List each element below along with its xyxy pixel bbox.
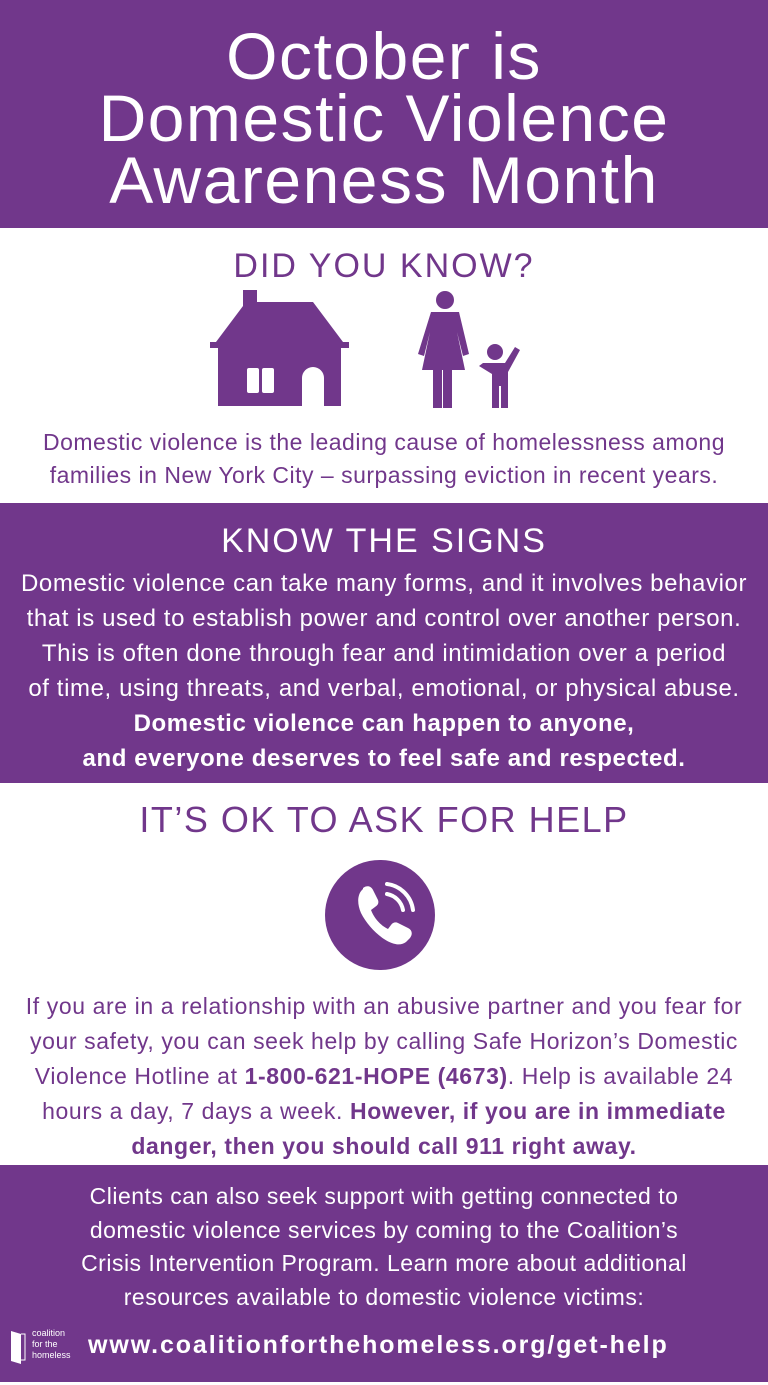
text: crisis intervention: domestic violence services by coming to the Coalition’s [90, 1216, 678, 1242]
text: signs: Domestic violence can take many forms, and it involves behavior [21, 570, 747, 597]
text: crisis intervention: resources available to domestic violence victims: [124, 1284, 644, 1310]
heading: did you know: DID YOU KNOW? [233, 247, 535, 285]
text: crisis intervention: Crisis Intervention Program. Learn more about additional [81, 1250, 687, 1276]
text: crisis intervention: Clients can also seek support with getting connected to [90, 1183, 678, 1209]
text: signs: and everyone deserves to feel safe and respected. [82, 745, 686, 772]
url: www.coalitionforthehomeless.org/get-help [88, 1331, 669, 1359]
text: hotline: If you are in a relationship with an abusive partner and you fear for [26, 993, 742, 1019]
text: signs: of time, using threats, and verbal, emotional, or physical abuse. [28, 675, 740, 702]
text: signs: This is often done through fear and intimidation over a period [42, 640, 726, 667]
text: signs [21, 570, 747, 772]
title [99, 19, 669, 217]
logo: coalition for the homeless: for the [32, 1339, 58, 1349]
text: hotline: danger, then you should call 911 right away. [131, 1133, 637, 1159]
panel: ask for help [26, 799, 742, 1159]
panel: did you know [43, 247, 725, 488]
logo: coalition for the homeless: homeless [32, 1350, 71, 1360]
text: crisis intervention [81, 1183, 687, 1310]
text: leading cause: families in New York City – surpassing eviction in recent years. [50, 462, 718, 488]
text: hotline: your safety, you can seek help by calling Safe Horizon’s Domestic [30, 1028, 738, 1054]
text: leading cause [43, 429, 725, 488]
logo: coalition for the homeless [11, 1328, 71, 1364]
text: signs: Domestic violence can happen to anyone, [134, 710, 634, 737]
logo: coalition for the homeless: coalition [32, 1328, 65, 1338]
text: leading cause: Domestic violence is the leading cause of homelessness among [43, 429, 725, 455]
heading: ask for help: IT’S OK TO ASK FOR HELP [139, 799, 629, 840]
text: hotline [26, 993, 742, 1159]
title: October is [226, 19, 542, 93]
panel: footer [0, 1165, 768, 1382]
heading: know the signs: KNOW THE SIGNS [221, 522, 547, 560]
text: hotline: hours a day, 7 days a week. However, if you are in immediate [42, 1098, 726, 1124]
title: Awareness Month [109, 143, 659, 217]
panel: know the signs [0, 503, 768, 783]
icon: mother and child [418, 291, 520, 408]
icon: phone [325, 860, 435, 970]
icon: house [210, 290, 349, 406]
text: signs: that is used to establish power and control over another person. [27, 605, 741, 632]
title: Domestic Violence [99, 81, 669, 155]
text: hotline: Violence Hotline at 1-800-621-HOPE (4673). Help is available 24 [35, 1063, 733, 1089]
header panel [0, 0, 768, 228]
